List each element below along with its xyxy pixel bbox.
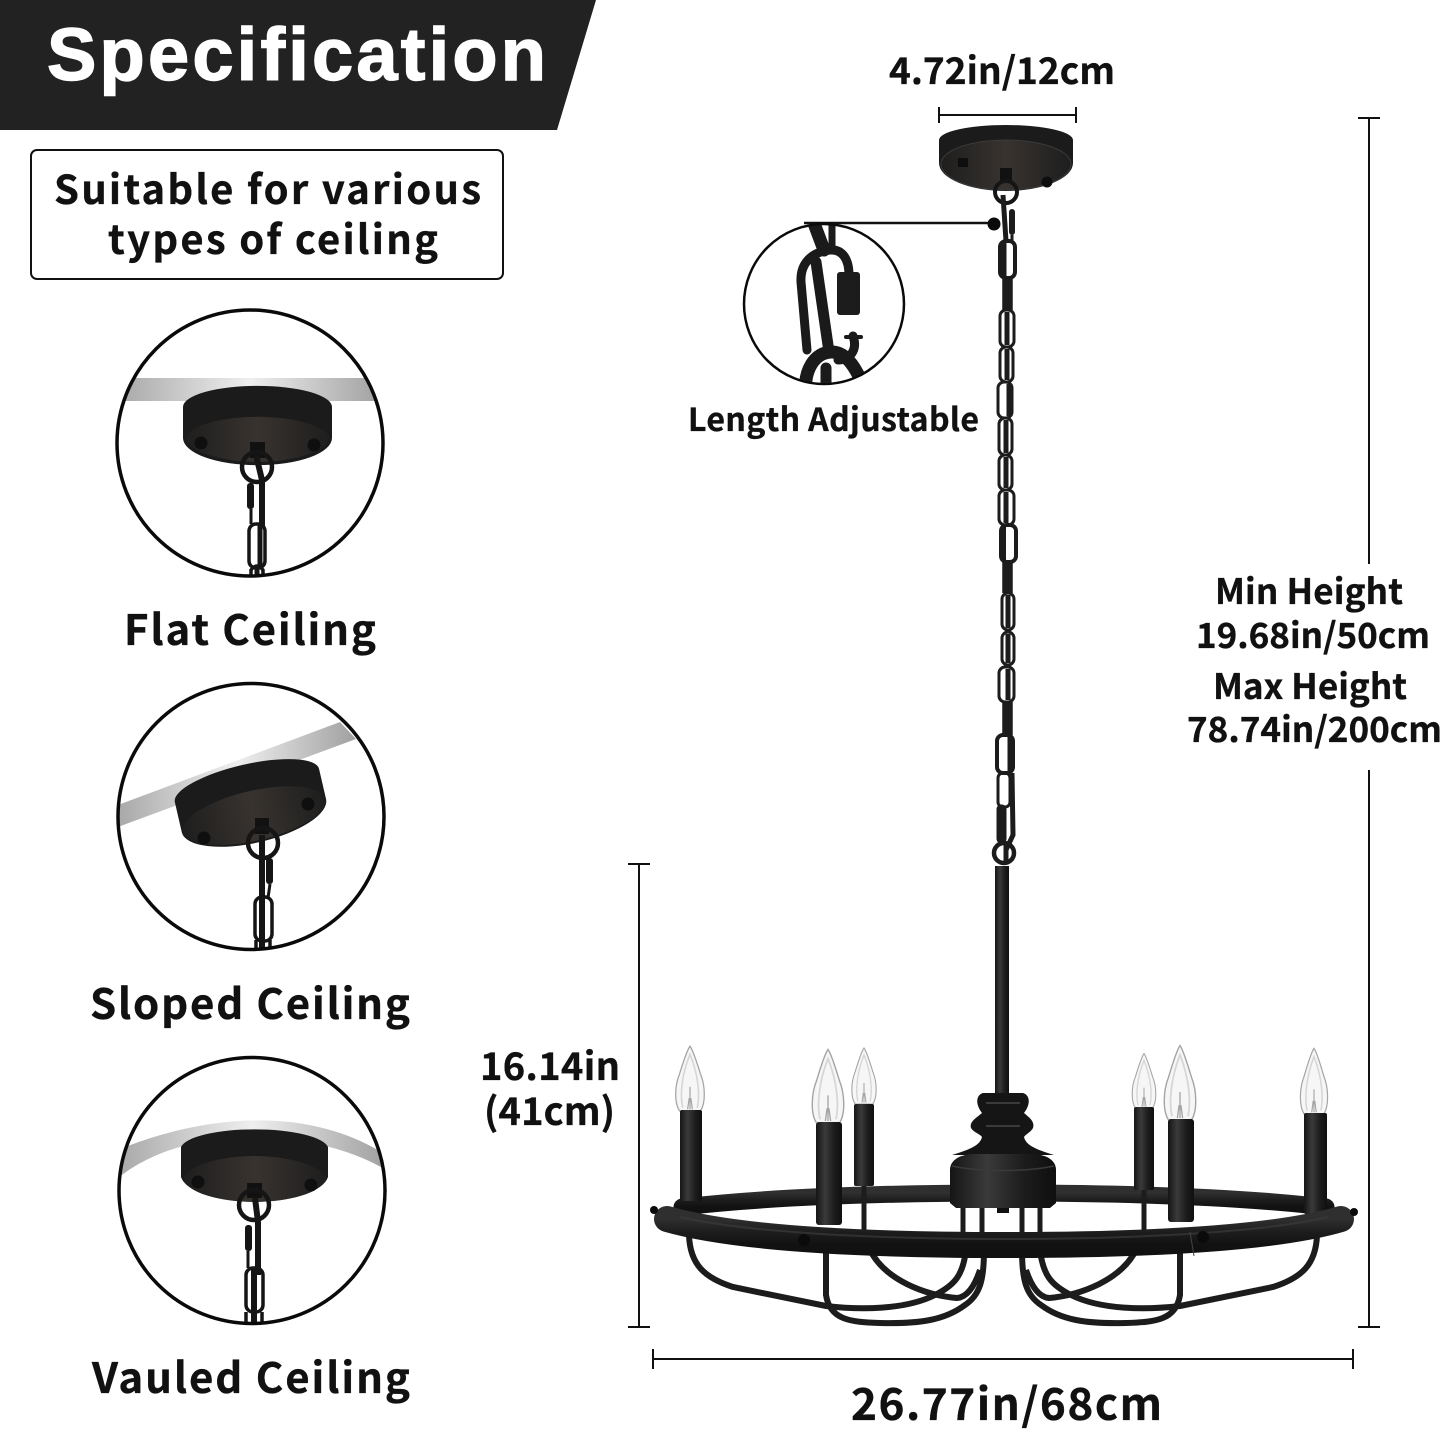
ceiling canopy [939,125,1073,203]
dimension: overall height: 19.68in/50cm [1196,608,1430,659]
callout box: suitable for various types of ceiling: types of ceiling [108,208,438,266]
dimension: canopy width [889,41,1115,123]
detail chain carabiner [801,218,866,395]
candle sleeves [680,1104,1327,1225]
panel: sloped ceiling thumbnail [118,684,384,955]
lower arms [689,1185,1317,1323]
panel: vaulted ceiling thumbnail [118,1058,386,1330]
dimension: overall height: Min Height [1215,564,1403,615]
dimension: fixture diameter: 26.77in/68cm [851,1369,1162,1433]
dimension: overall height: Max Height [1213,659,1407,710]
label: Length Adjustable: Length Adjustable [688,395,979,441]
dimension: fixture height: 16.14in [480,1036,620,1091]
callout: length adjustable detail [688,218,1000,441]
label: Flat Ceiling: Flat Ceiling [124,597,376,658]
dimension: overall height: 78.74in/200cm [1187,702,1442,753]
dimension: fixture diameter [653,1349,1353,1433]
bulbs [676,1046,1328,1123]
header banner: Specification [0,0,596,130]
header banner: Specification: Specification [47,13,546,96]
chandelier [650,125,1358,1323]
front ring tube [667,1219,1341,1245]
dimension: canopy width: 4.72in/12cm [889,41,1115,95]
dimension: fixture height [480,864,650,1327]
dimension: fixture height: (41cm) [484,1081,615,1136]
back ring tube [682,1193,1326,1207]
ring bolts [650,1206,1358,1246]
label: Vauled Ceiling: Vauled Ceiling [91,1345,410,1406]
panel: flat ceiling thumbnail [117,310,383,590]
callout box: suitable for various types of ceiling: Suitable for various [54,158,481,216]
center rod [995,866,1009,1096]
callout box: suitable for various types of ceiling [31,150,503,279]
label: Sloped Ceiling: Sloped Ceiling [90,971,410,1032]
dimension: overall height [1187,118,1442,1327]
center finial and cup [950,1093,1056,1213]
hanging chain [994,195,1016,864]
